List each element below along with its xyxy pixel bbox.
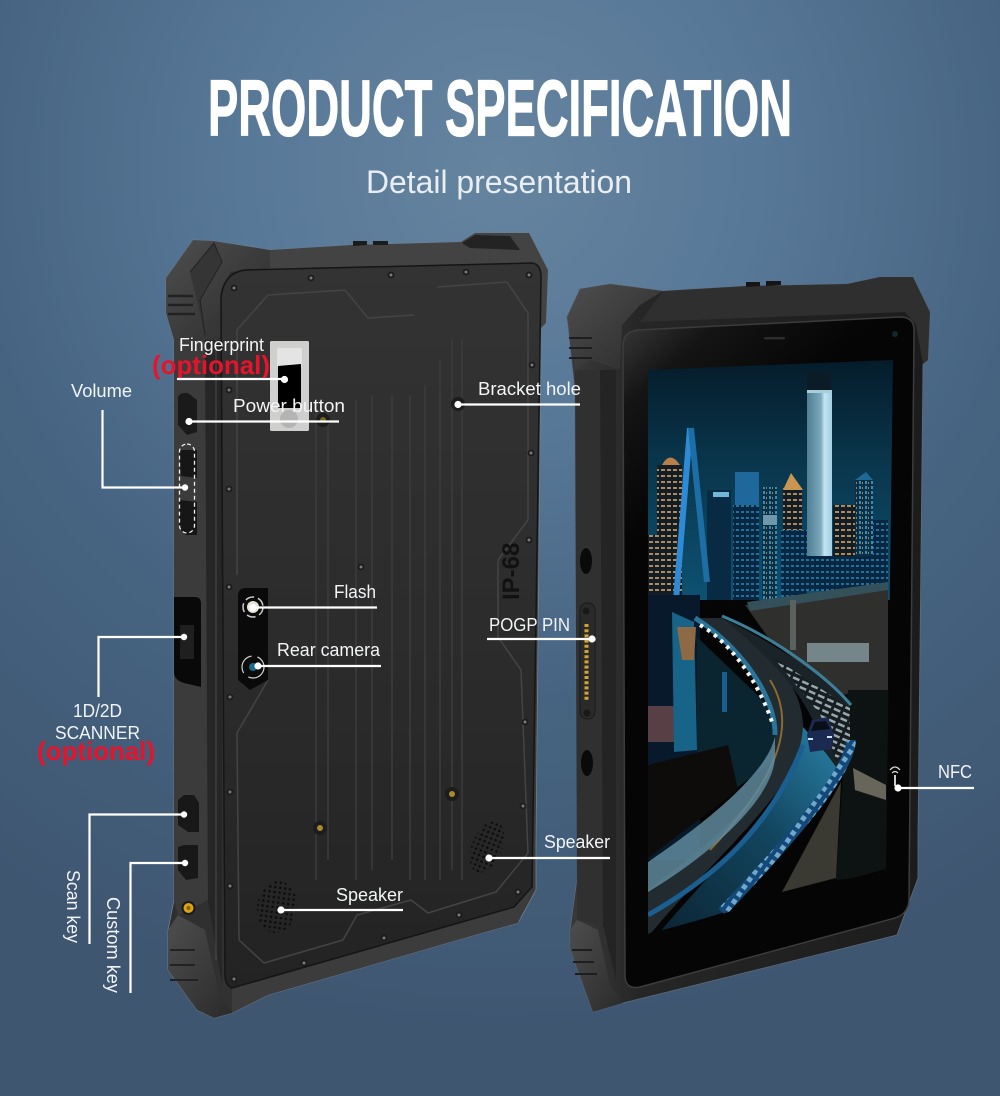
under overpass wall	[745, 585, 888, 695]
bracket hole upper	[580, 548, 592, 574]
subtitle: Detail presentation	[366, 164, 632, 200]
front top edge	[640, 277, 930, 364]
callout: volume	[71, 381, 188, 491]
rear speaker left	[254, 878, 300, 936]
callout: speaker rear: Speaker	[336, 885, 403, 905]
bridge fence	[648, 735, 775, 892]
callout: volume: Volume	[71, 381, 132, 401]
overpass pillar	[790, 600, 796, 650]
callout: nfc	[894, 762, 974, 792]
dashed volume outline	[180, 444, 194, 533]
striped road section	[778, 662, 850, 758]
fingerprint module	[270, 341, 309, 431]
pale rocks	[853, 768, 886, 800]
dark ground left	[648, 745, 738, 858]
callout: fingerprint: (optional)	[152, 350, 270, 380]
callout: 1D/2D scanner: 1D/2D	[73, 701, 122, 721]
model mark: IP-68	[498, 543, 525, 600]
right checkered rail	[722, 740, 851, 912]
led lights	[700, 625, 773, 725]
camera module	[238, 588, 268, 690]
city buildings	[648, 458, 888, 605]
main road surface	[648, 618, 803, 934]
callout: rear camera	[254, 640, 381, 670]
right dark foliage	[836, 690, 890, 880]
front tablet	[567, 277, 930, 1012]
flash	[243, 597, 263, 617]
amber road line	[710, 680, 782, 850]
rear tablet	[166, 233, 548, 1018]
rear top-left corner bumper	[166, 240, 270, 345]
back plate raised lines	[237, 282, 528, 963]
nfc icon	[890, 767, 900, 786]
lower rail blue	[648, 745, 803, 915]
back plate	[221, 263, 541, 988]
callout: custom key	[103, 860, 188, 993]
front top-left bumper	[567, 284, 663, 370]
rear speaker right	[463, 816, 511, 878]
scan and custom keys	[178, 795, 199, 880]
front glass bezel	[623, 317, 914, 988]
screws	[226, 269, 535, 982]
rear camera lens	[242, 656, 264, 678]
overpass	[747, 582, 888, 611]
callout: bracket hole	[454, 379, 581, 408]
callout: pogo pin: POGP PIN	[489, 615, 570, 635]
rear tablet body	[166, 233, 548, 1018]
callout: speaker side: Speaker	[544, 832, 610, 852]
front tablet body	[567, 277, 930, 1012]
callout: flash: Flash	[334, 582, 376, 602]
rear bottom-left corner bumper	[168, 915, 232, 1018]
lit building patch	[807, 643, 869, 662]
second lane	[660, 727, 845, 932]
earpiece	[764, 337, 785, 340]
callout: custom key: Custom key	[103, 897, 123, 993]
yellow connector	[182, 901, 196, 915]
callout: scan key	[63, 811, 187, 944]
callout: nfc: NFC	[938, 762, 972, 782]
callout: fingerprint: Fingerprint	[179, 335, 264, 355]
front camera	[892, 331, 898, 337]
callout: rear camera: Rear camera	[277, 640, 381, 660]
bracket hole lower	[581, 750, 593, 776]
callout: speaker side	[485, 832, 610, 862]
callout: scan key: Scan key	[63, 870, 83, 943]
main tower	[807, 372, 832, 560]
pogo pin connector	[580, 603, 595, 719]
scanner window	[174, 597, 201, 687]
tan retaining wall	[782, 782, 841, 892]
car	[807, 717, 834, 752]
rear top edge	[246, 233, 548, 328]
volume buttons	[179, 450, 197, 535]
callout: bracket hole: Bracket hole	[478, 379, 581, 399]
bracket holes	[313, 397, 465, 835]
callout: fingerprint	[152, 335, 288, 383]
callout: 1D/2D scanner: (optional)	[37, 736, 155, 766]
callout: pogo pin	[487, 615, 596, 643]
callout: speaker rear	[277, 885, 403, 914]
far rail	[722, 616, 851, 705]
callout: 1D/2D scanner: SCANNER	[55, 723, 140, 743]
top side buttons	[353, 241, 388, 246]
callout: 1D/2D scanner	[37, 634, 187, 766]
rear side strip	[174, 340, 208, 915]
upper lane asphalt	[722, 618, 850, 775]
screen city photo	[648, 360, 894, 934]
power button	[178, 393, 197, 435]
callout: power button: Power button	[233, 396, 345, 416]
callout: power button	[185, 396, 345, 425]
front left side strip	[575, 370, 603, 925]
top side buttons	[746, 281, 781, 287]
left lower district	[648, 595, 700, 860]
back ribs	[316, 340, 462, 880]
fence rail	[695, 618, 775, 735]
callout: flash	[249, 582, 377, 611]
bridge pylon and cables	[673, 428, 710, 595]
front bottom-left bumper	[570, 920, 623, 1012]
